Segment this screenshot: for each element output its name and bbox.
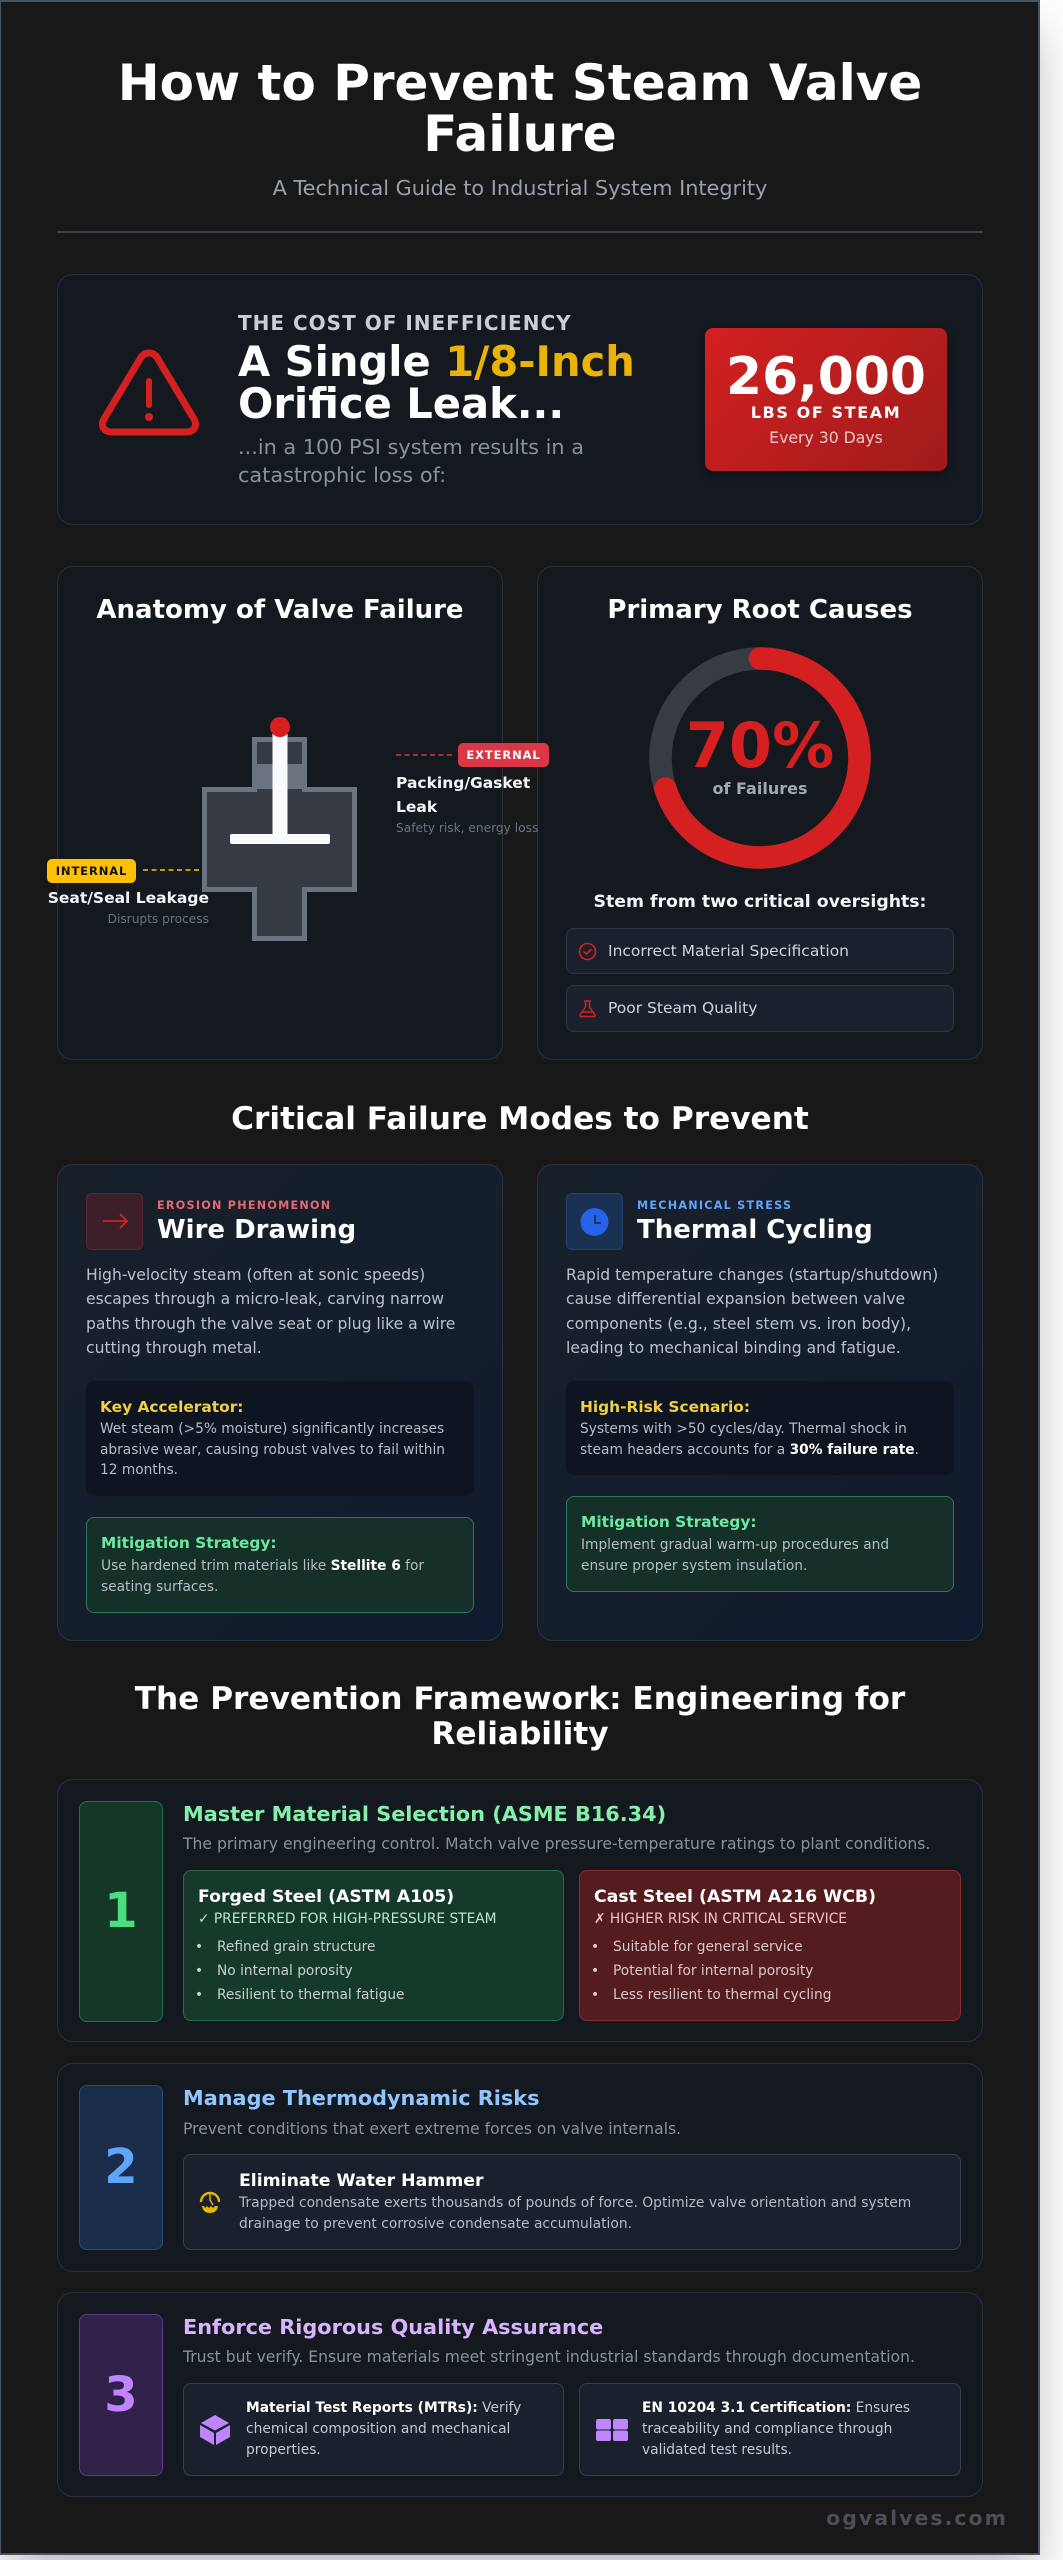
stat period: Every 30 Days <box>769 428 883 447</box>
step title: Manage Thermodynamic Risks <box>183 2086 540 2110</box>
stat caption: of Failures <box>713 779 807 798</box>
leak description: catastrophic loss of: <box>238 463 446 487</box>
callout heading: High-Risk Scenario: <box>580 1398 750 1416</box>
box bullets: • <box>195 1963 203 1979</box>
panel: primary root causes <box>537 566 983 1060</box>
heading: anatomy: Anatomy of Valve Failure <box>96 595 464 625</box>
leak description: ...in a 100 PSI system results in a <box>238 435 584 459</box>
callout: packing gasket leak: Packing/Gasket <box>396 774 530 792</box>
box: forged steel <box>183 1870 564 2021</box>
panel: step 1 material selection <box>57 1779 983 2042</box>
callout detail: internal: Disrupts process <box>108 912 209 926</box>
item: incorrect material <box>566 928 954 974</box>
box heading: Eliminate Water Hammer <box>239 2171 484 2191</box>
icon: water hammer <box>200 2192 220 2213</box>
icon: check badge <box>578 942 596 960</box>
description: High-velocity steam (often at sonic speeds) <box>86 1266 425 1284</box>
step number 2 <box>79 2085 163 2250</box>
icon: arrow <box>86 1193 143 1250</box>
box: material test reports <box>183 2383 564 2476</box>
callout: seat seal leakage: Seat/Seal Leakage <box>48 889 209 907</box>
description <box>86 1266 455 1357</box>
item text: Poor Steam Quality <box>608 999 757 1017</box>
icon: flask <box>579 1000 596 1018</box>
box text: validated test results. <box>642 2442 792 2458</box>
box tag: ✗ HIGHER RISK IN CRITICAL SERVICE <box>594 1911 847 1927</box>
mitigation text <box>101 1558 424 1595</box>
callout text <box>580 1421 919 1458</box>
box text <box>238 2195 911 2232</box>
step subtitle: Prevent conditions that exert extreme forces on valve internals. <box>183 2120 681 2138</box>
section heading: prevention framework: The Prevention Framework: Engineering for <box>135 1681 905 1717</box>
box text: chemical composition and mechanical <box>246 2421 510 2437</box>
subtitle: A Technical Guide to Industrial System Integrity <box>273 176 767 200</box>
description: cause differential expansion between valve <box>566 1290 905 1308</box>
box bullet text: No internal porosity <box>217 1963 353 1979</box>
box bullet text: Potential for internal porosity <box>613 1963 813 1979</box>
step title: Enforce Rigorous Quality Assurance <box>183 2315 603 2339</box>
leak headline <box>238 337 635 428</box>
description: escapes through a micro-leak, carving narrow <box>86 1290 444 1308</box>
mitigation text: ensure proper system insulation. <box>581 1558 807 1574</box>
dashed line: internal <box>143 869 199 871</box>
item: poor steam quality <box>566 985 954 1032</box>
mitigation text <box>581 1537 889 1574</box>
box heading: Forged Steel (ASTM A105) <box>198 1887 454 1907</box>
box text: Material Test Reports (MTRs): Verify <box>246 2400 521 2416</box>
box text: properties. <box>246 2442 321 2458</box>
badge: internal <box>47 859 136 883</box>
panel: step 3 quality assurance <box>57 2292 983 2497</box>
watermark: ogvalves.com <box>826 2506 1008 2530</box>
callout text: steam headers accounts for a 30% failure rate. <box>580 1442 919 1458</box>
leak description <box>238 435 584 487</box>
icon: warning triangle <box>99 350 199 436</box>
box text: EN 10204 3.1 Certification: Ensures <box>642 2400 910 2416</box>
stat number: 26,000 <box>726 347 926 407</box>
description: cutting through metal. <box>86 1339 262 1357</box>
step number 1: 1 <box>104 1883 138 1939</box>
oversights lead-in: Stem from two critical oversights: <box>594 892 926 912</box>
item text: Incorrect Material Specification <box>608 942 849 960</box>
step title: Master Material Selection (ASME B16.34) <box>183 1802 666 1826</box>
mitigation text: seating surfaces. <box>101 1579 218 1595</box>
box text: drainage to prevent corrosive condensate accumulation. <box>239 2216 632 2232</box>
box text <box>642 2400 910 2458</box>
section heading: prevention framework: Reliability <box>431 1716 609 1752</box>
panel: step 2 thermodynamic risks <box>57 2063 983 2272</box>
description <box>566 1266 938 1357</box>
box bullet text <box>217 1939 404 2003</box>
callout text: abrasive wear, causing robust valves to fail within <box>100 1442 445 1458</box>
box text: traceability and compliance through <box>642 2421 892 2437</box>
badge: internal: INTERNAL <box>56 864 127 878</box>
section heading: prevention framework <box>134 1681 906 1752</box>
callout: packing gasket leak: Leak <box>396 798 437 816</box>
step subtitle: Trust but verify. Ensure materials meet stringent industrial standards through documentation. <box>183 2348 915 2366</box>
box bullet text <box>613 1939 831 2003</box>
callout: mitigation <box>86 1517 474 1613</box>
callout text: 12 months. <box>100 1462 178 1478</box>
callout: high-risk scenario <box>566 1381 954 1475</box>
callout: mitigation <box>566 1496 954 1592</box>
callout detail: external: Safety risk, energy loss <box>396 821 538 835</box>
icon: cube <box>200 2415 230 2445</box>
description: Rapid temperature changes (startup/shutdown) <box>566 1266 938 1284</box>
badge: external: EXTERNAL <box>466 748 541 762</box>
callout text <box>100 1421 445 1478</box>
stat callout: 26,000 lbs <box>705 328 947 471</box>
stat: 70%: 70% <box>686 709 834 782</box>
box bullets: • <box>591 1963 599 1979</box>
box bullets: • <box>195 1939 203 1955</box>
callout text: Wet steam (>5% moisture) significantly increases <box>100 1421 444 1437</box>
card title: Thermal Cycling <box>637 1215 873 1245</box>
stat unit: LBS OF STEAM <box>751 403 901 422</box>
box heading: Cast Steel (ASTM A216 WCB) <box>594 1887 876 1907</box>
box bullet text: Resilient to thermal fatigue <box>217 1987 404 2003</box>
badge: external <box>458 743 549 767</box>
box bullets: • <box>591 1939 599 1955</box>
step number 2: 2 <box>104 2139 138 2195</box>
heading: root causes: Primary Root Causes <box>607 595 913 625</box>
mitigation heading: Mitigation Strategy: <box>101 1534 277 1552</box>
box bullets <box>195 1939 203 2003</box>
valve diagram <box>202 717 357 941</box>
step number 3: 3 <box>104 2367 138 2423</box>
description: leading to mechanical binding and fatigue. <box>566 1339 901 1357</box>
box bullets <box>591 1939 599 2003</box>
leak headline: A Single 1/8-Inch <box>238 337 635 386</box>
header divider <box>57 231 983 233</box>
step number 1 <box>79 1801 163 2022</box>
callout: key accelerator <box>86 1381 474 1496</box>
panel: thermal cycling <box>537 1164 983 1641</box>
box: water hammer <box>183 2154 961 2250</box>
description: paths through the valve seat or plug like a wire <box>86 1315 455 1333</box>
icon: clock <box>566 1193 623 1250</box>
panel: anatomy of valve failure <box>57 566 503 1060</box>
callout heading: Key Accelerator: <box>100 1398 243 1416</box>
callout text: Systems with >50 cycles/day. Thermal shock in <box>580 1421 907 1437</box>
box tag: ✓ PREFERRED FOR HIGH-PRESSURE STEAM <box>198 1911 497 1927</box>
description: components (e.g., steel stem vs. iron body), <box>566 1315 911 1333</box>
box bullet text: Suitable for general service <box>613 1939 803 1955</box>
box: en 10204 certification <box>579 2383 961 2476</box>
box: cast steel <box>579 1870 961 2021</box>
mitigation heading: Mitigation Strategy: <box>581 1513 757 1531</box>
step subtitle: The primary engineering control. Match valve pressure-temperature ratings to plant conditions. <box>183 1835 930 1853</box>
panel: wire drawing <box>57 1164 503 1641</box>
leak headline: Orifice Leak... <box>238 379 564 428</box>
step number 3 <box>79 2314 163 2476</box>
box bullets: • <box>591 1987 599 2003</box>
box bullet text: Refined grain structure <box>217 1939 375 1955</box>
panel: cost of inefficiency <box>57 274 983 525</box>
card title: Wire Drawing <box>157 1215 356 1245</box>
dashed line: external <box>396 754 452 756</box>
box text: Trapped condensate exerts thousands of pounds of force. Optimize valve orientation and system <box>239 2195 911 2211</box>
mitigation text: Use hardened trim materials like Stellite 6 for <box>101 1558 424 1574</box>
box bullets: • <box>195 1987 203 2003</box>
donut chart: 70% <box>649 647 871 869</box>
kicker: MECHANICAL STRESS <box>637 1199 792 1212</box>
box bullet text: Less resilient to thermal cycling <box>613 1987 831 2003</box>
section heading: failure modes: Critical Failure Modes to Prevent <box>231 1101 809 1137</box>
callout: packing gasket leak <box>396 774 530 816</box>
box text <box>246 2400 521 2458</box>
mitigation text: Implement gradual warm-up procedures and <box>581 1537 889 1553</box>
eyebrow: THE COST OF INEFFICIENCY <box>238 311 572 335</box>
icon: grid <box>596 2419 628 2441</box>
title: How to Prevent Steam Valve Failure <box>118 54 922 163</box>
kicker: EROSION PHENOMENON <box>157 1199 331 1212</box>
